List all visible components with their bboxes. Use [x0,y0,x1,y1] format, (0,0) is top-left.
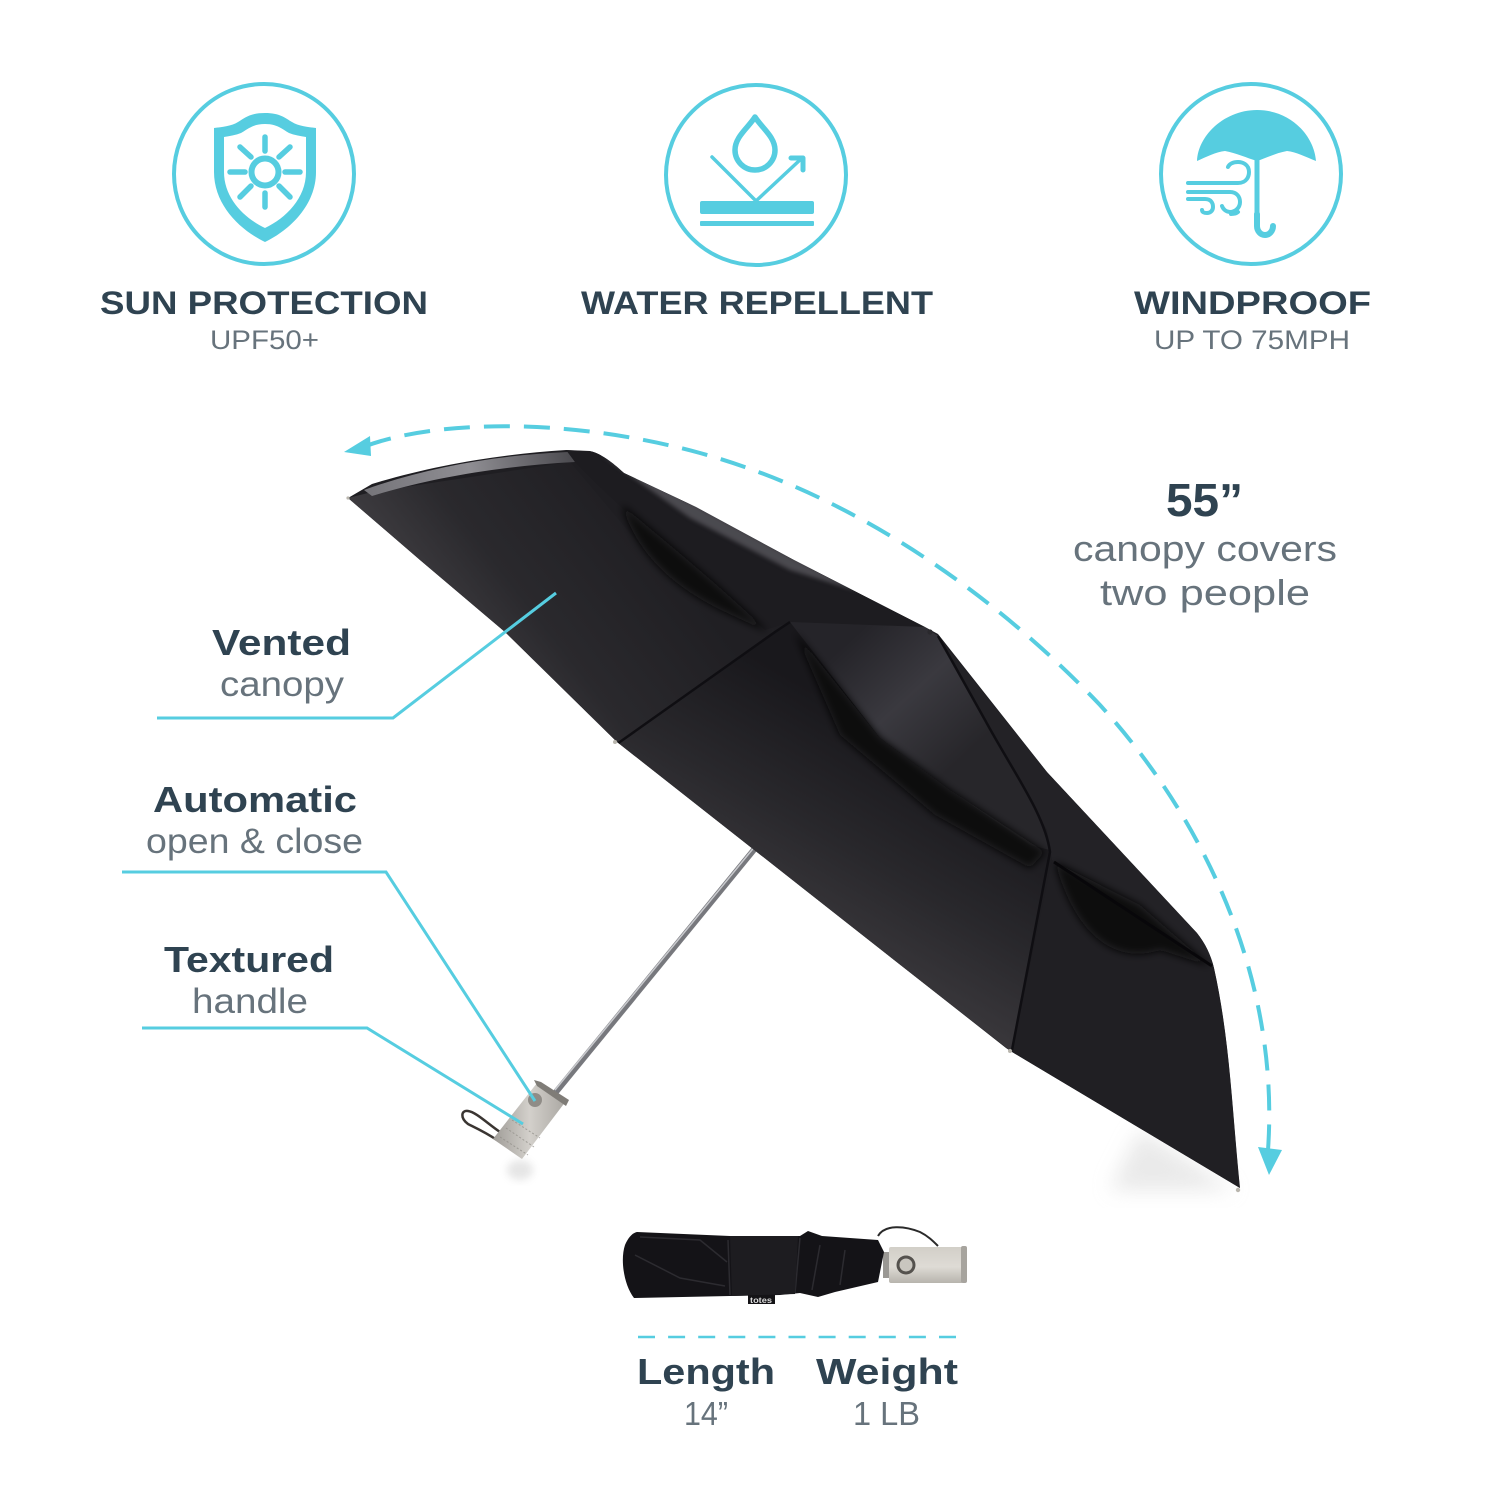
open umbrella canopy [340,440,1250,1200]
rim highlight [364,452,575,496]
stat: weight: 1 LB [853,1395,920,1432]
fabric [623,1231,884,1298]
totes tag: totes [750,1296,773,1305]
panel: lower right canopy [1012,968,1240,1188]
heading: sun protection: SUN PROTECTION [100,285,428,321]
stat: length [637,1351,775,1432]
label: automatic open and close: open & close [146,822,363,861]
stat: length: 14” [684,1395,728,1432]
stat: 55 inch canopy: canopy covers [1073,528,1337,569]
dashed arc arrow: canopy span [344,426,1282,1175]
closed umbrella [623,1227,967,1305]
umbrella handle [493,1080,569,1159]
icon: water repellent [666,85,846,265]
handle body [889,1247,963,1283]
stat: 55 inch canopy: 55” [1166,474,1243,526]
label: textured handle: handle [192,982,308,1021]
label: automatic open and close: Automatic [153,779,357,820]
icon: sun protection [174,84,354,264]
label: vented canopy: canopy [220,665,345,704]
callout: textured line [142,1028,523,1124]
umbrella shadows [507,1130,1235,1190]
panel: upper vent flap [566,450,925,630]
ribs [617,622,1050,1050]
right crease line [1054,862,1212,966]
panel: left canopy [349,476,661,744]
label: vented canopy [212,622,351,704]
icon: windproof umbrella [1161,84,1341,264]
label: textured handle: Textured [164,939,334,980]
label: textured handle [164,939,334,1021]
panel: upper right flap [1029,750,1214,968]
label: vented canopy: Vented [212,622,351,663]
cord [878,1227,938,1246]
stat: length: Length [637,1351,775,1392]
umbrella shaft [555,845,757,1092]
stat: 55 inch canopy: two people [1100,572,1310,613]
subheading: upf50+: UPF50+ [210,325,319,355]
label: automatic open and close [146,779,363,861]
panel: middle flap [790,622,1050,850]
heading: sun protection [100,285,428,355]
lower right crease shadow [1055,862,1210,966]
totes tag [748,1295,775,1305]
callout: automatic line [122,872,535,1101]
dashed divider [638,1336,956,1338]
rib tips [346,496,1240,1192]
flap highlight [607,460,852,590]
subheading: up to 75mph: UP TO 75MPH [1154,325,1350,355]
middle crease shadow [795,632,1045,868]
heading: windproof [1134,285,1371,355]
crease shadow [622,505,768,632]
stat: 55 inch canopy [1073,474,1337,613]
metal collar [883,1252,893,1278]
stat: weight [816,1351,958,1432]
stat: weight: Weight [816,1351,958,1392]
panel: middle canopy [619,720,1032,1050]
callout: vented canopy line [157,593,556,718]
handle strap [462,1111,500,1140]
heading: windproof: WINDPROOF [1134,285,1371,321]
heading: water repellent: WATER REPELLENT [581,285,934,321]
